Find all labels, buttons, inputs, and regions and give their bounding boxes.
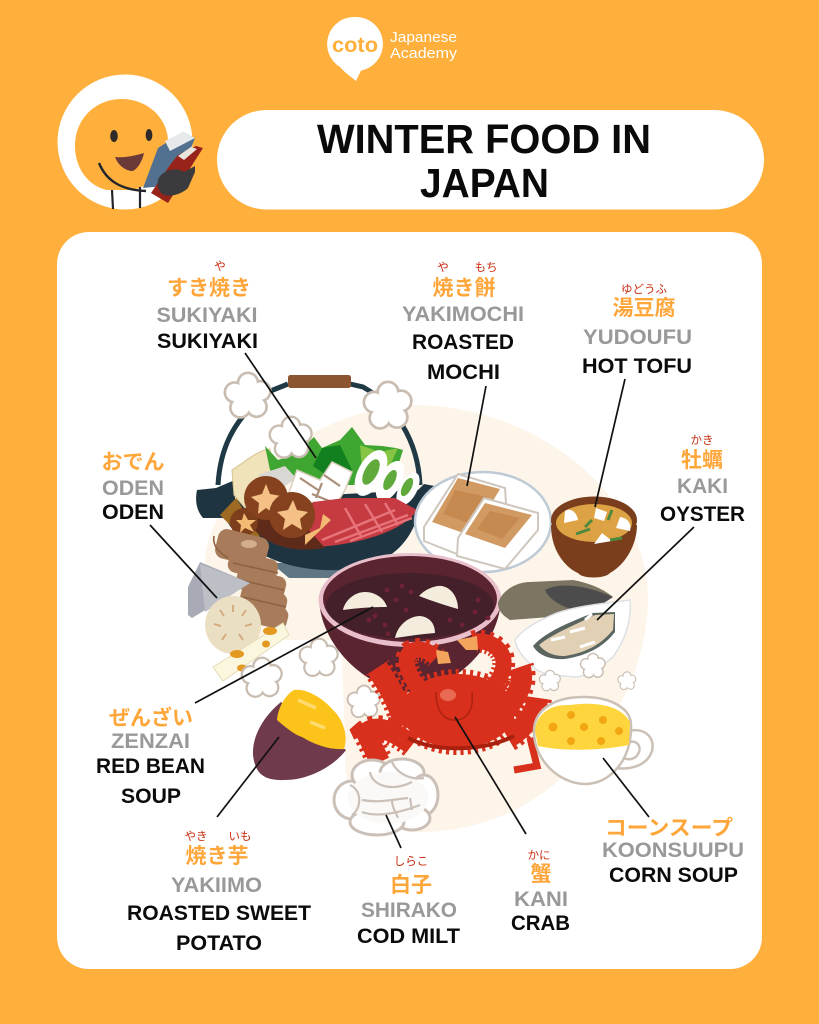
shirako cod milt: [334, 759, 438, 835]
callout: kani: 蟹: [530, 863, 552, 886]
callout: yakiimo: やき: [184, 830, 208, 843]
callout: shirako: [357, 815, 460, 948]
logo: Coto Japanese Academy: coto: [332, 34, 378, 57]
callout: oden: おでん: [102, 451, 164, 474]
logo: Coto Japanese Academy: Academy: [390, 45, 458, 62]
callout: kaki: かき: [690, 434, 714, 447]
miso hot tofu bowl: [551, 496, 637, 578]
callout: kaki: 牡蠣: [681, 449, 723, 472]
callout: yakiimo: YAKIIMO: [171, 874, 262, 897]
callout: yakimochi: や: [437, 261, 449, 274]
callout: zenzai: RED BEAN: [96, 755, 205, 778]
sukiyaki pot: [196, 375, 440, 578]
callout: koonsuupu: コーンスープ: [605, 817, 733, 840]
callout: yudoufu: HOT TOFU: [582, 355, 692, 378]
steam clouds by oyster: [540, 654, 635, 690]
callout: yakimochi: MOCHI: [427, 361, 500, 384]
callout: sukiyaki: SUKIYAKI: [157, 330, 258, 353]
steam clouds around pot: [226, 374, 410, 456]
callout: sukiyaki: や: [214, 260, 226, 273]
mascot reading books: [58, 74, 203, 210]
callout: yakiimo: [127, 737, 311, 955]
callout: kaki: KAKI: [677, 475, 728, 498]
callout: zenzai: [96, 607, 373, 808]
callout: shirako: しらこ: [394, 855, 428, 868]
callout: sukiyaki: すき焼き: [167, 277, 251, 300]
sweet potato: [253, 690, 346, 780]
callout: kani: かに: [528, 849, 550, 862]
title pill: JAPAN: [420, 160, 549, 206]
callout: zenzai: ZENZAI: [111, 730, 190, 753]
callout: oden: ODEN: [102, 501, 164, 524]
callout: yudoufu: 湯豆腐: [612, 297, 676, 320]
callout: yakimochi: [402, 261, 524, 486]
main white panel: [57, 232, 762, 969]
callout: kani: KANI: [514, 888, 568, 911]
callout: shirako: 白子: [390, 874, 432, 897]
callout: kaki: [597, 434, 745, 620]
callout: shirako: COD MILT: [357, 925, 460, 948]
callout: yudoufu: [582, 283, 692, 507]
callout: koonsuupu: [602, 758, 744, 887]
title pill: WINTER FOOD IN: [317, 116, 651, 162]
callout: yakiimo: POTATO: [176, 932, 262, 955]
callout: yakiimo: ROASTED SWEET: [127, 902, 311, 925]
callout: yudoufu: ゆどうふ: [621, 283, 667, 296]
callout: oden: [102, 451, 217, 598]
callout: yakimochi: 焼き餅: [432, 277, 496, 300]
callout: yakiimo: いも: [228, 830, 252, 843]
corn soup cup: [534, 697, 653, 784]
logo: Coto Japanese Academy: Japanese: [390, 29, 457, 46]
callout: koonsuupu: KOONSUUPU: [602, 839, 744, 862]
callout: oden: ODEN: [102, 477, 164, 500]
callout: kaki: OYSTER: [660, 503, 745, 526]
callout: kani: [455, 717, 570, 935]
callout: yakimochi: ROASTED: [412, 331, 514, 354]
red bean soup bowl: [318, 553, 502, 692]
steam clouds by skewer and bowl: [243, 640, 379, 716]
callout: zenzai: ぜんざい: [109, 706, 193, 730]
title pill: [217, 110, 764, 210]
callout: sukiyaki: [156, 260, 316, 458]
beige backdrop blob: [205, 405, 648, 832]
king crab: [366, 636, 538, 770]
callout: shirako: SHIRAKO: [361, 899, 457, 922]
logo: Coto Japanese Academy: [327, 17, 458, 81]
roasted mochi on plate: [415, 472, 551, 572]
callout: sukiyaki: SUKIYAKI: [156, 304, 258, 327]
callout: yakimochi: YAKIMOCHI: [402, 303, 524, 326]
oden skewer: [188, 527, 290, 681]
callout: zenzai: SOUP: [121, 785, 181, 808]
callout: kani: CRAB: [511, 912, 570, 935]
oyster: [498, 580, 630, 677]
callout: yudoufu: YUDOUFU: [583, 326, 692, 349]
callout: yakiimo: 焼き芋: [186, 845, 248, 868]
callout: yakimochi: もち: [474, 261, 498, 274]
callout: koonsuupu: CORN SOUP: [609, 864, 738, 887]
